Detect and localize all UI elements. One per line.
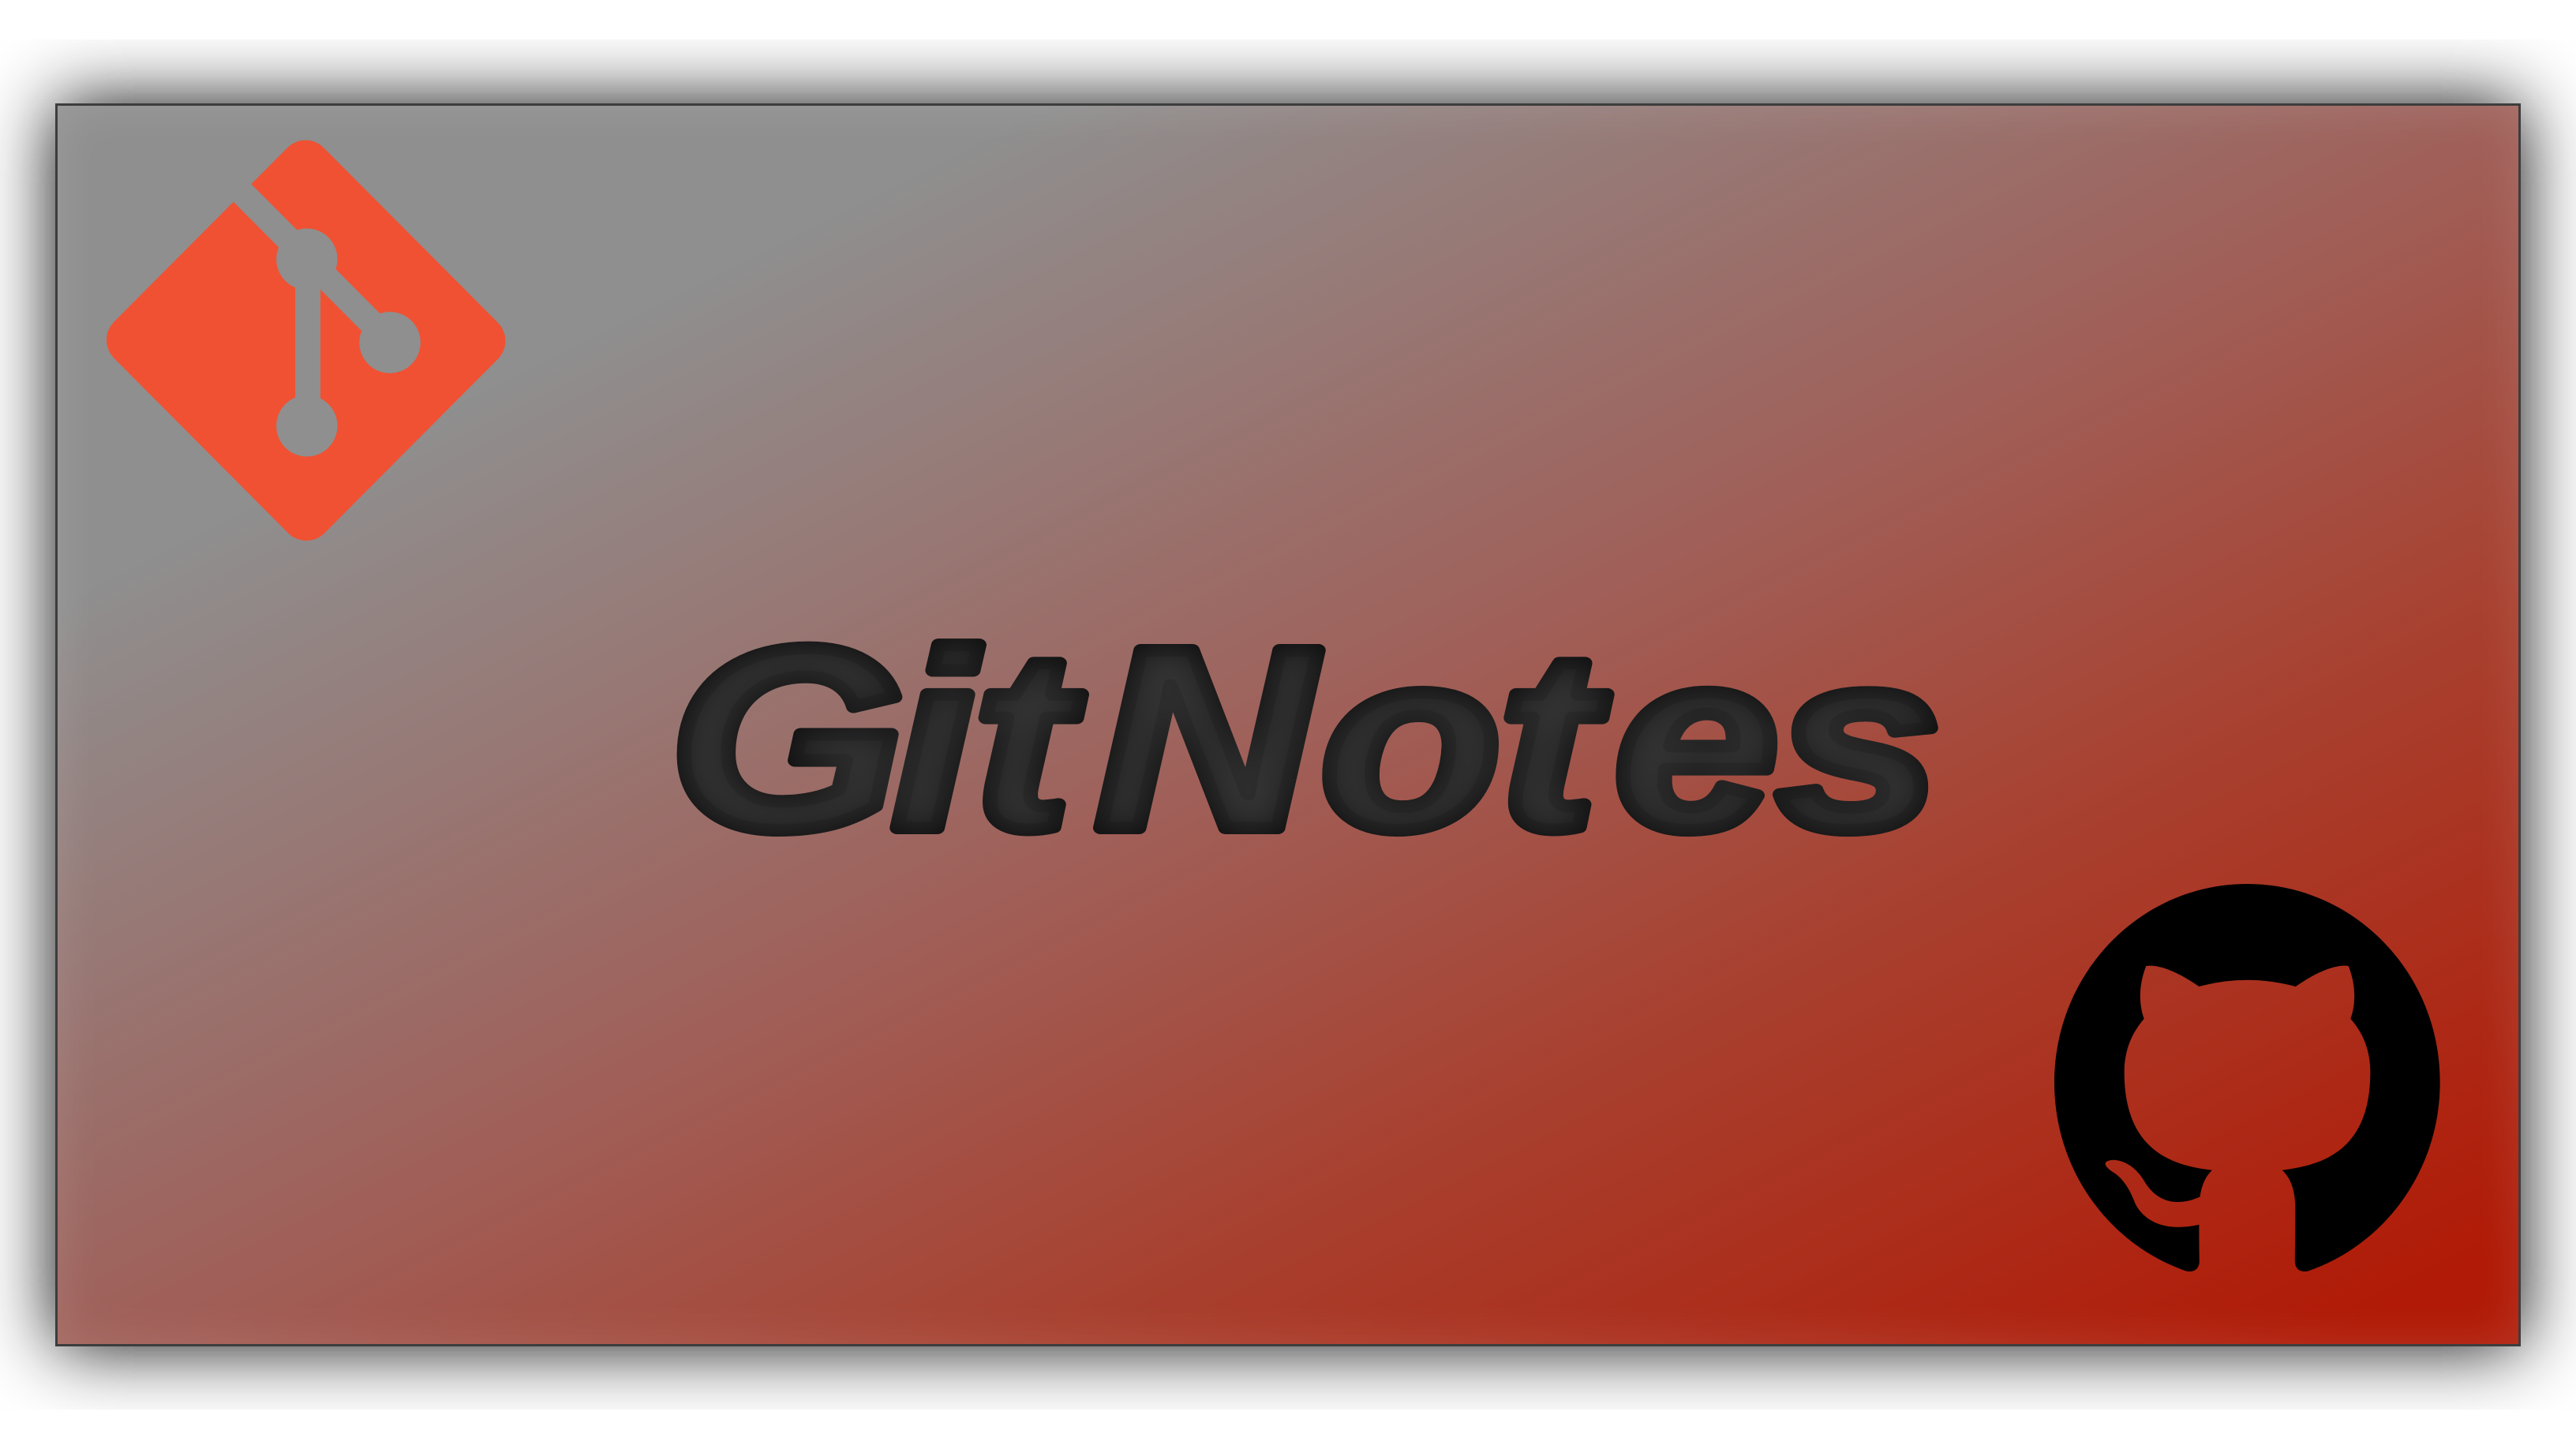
title: GitNotes: GitNotes xyxy=(669,595,1941,883)
icon: git logo xyxy=(107,140,505,541)
icon: github mark xyxy=(2054,884,2440,1271)
